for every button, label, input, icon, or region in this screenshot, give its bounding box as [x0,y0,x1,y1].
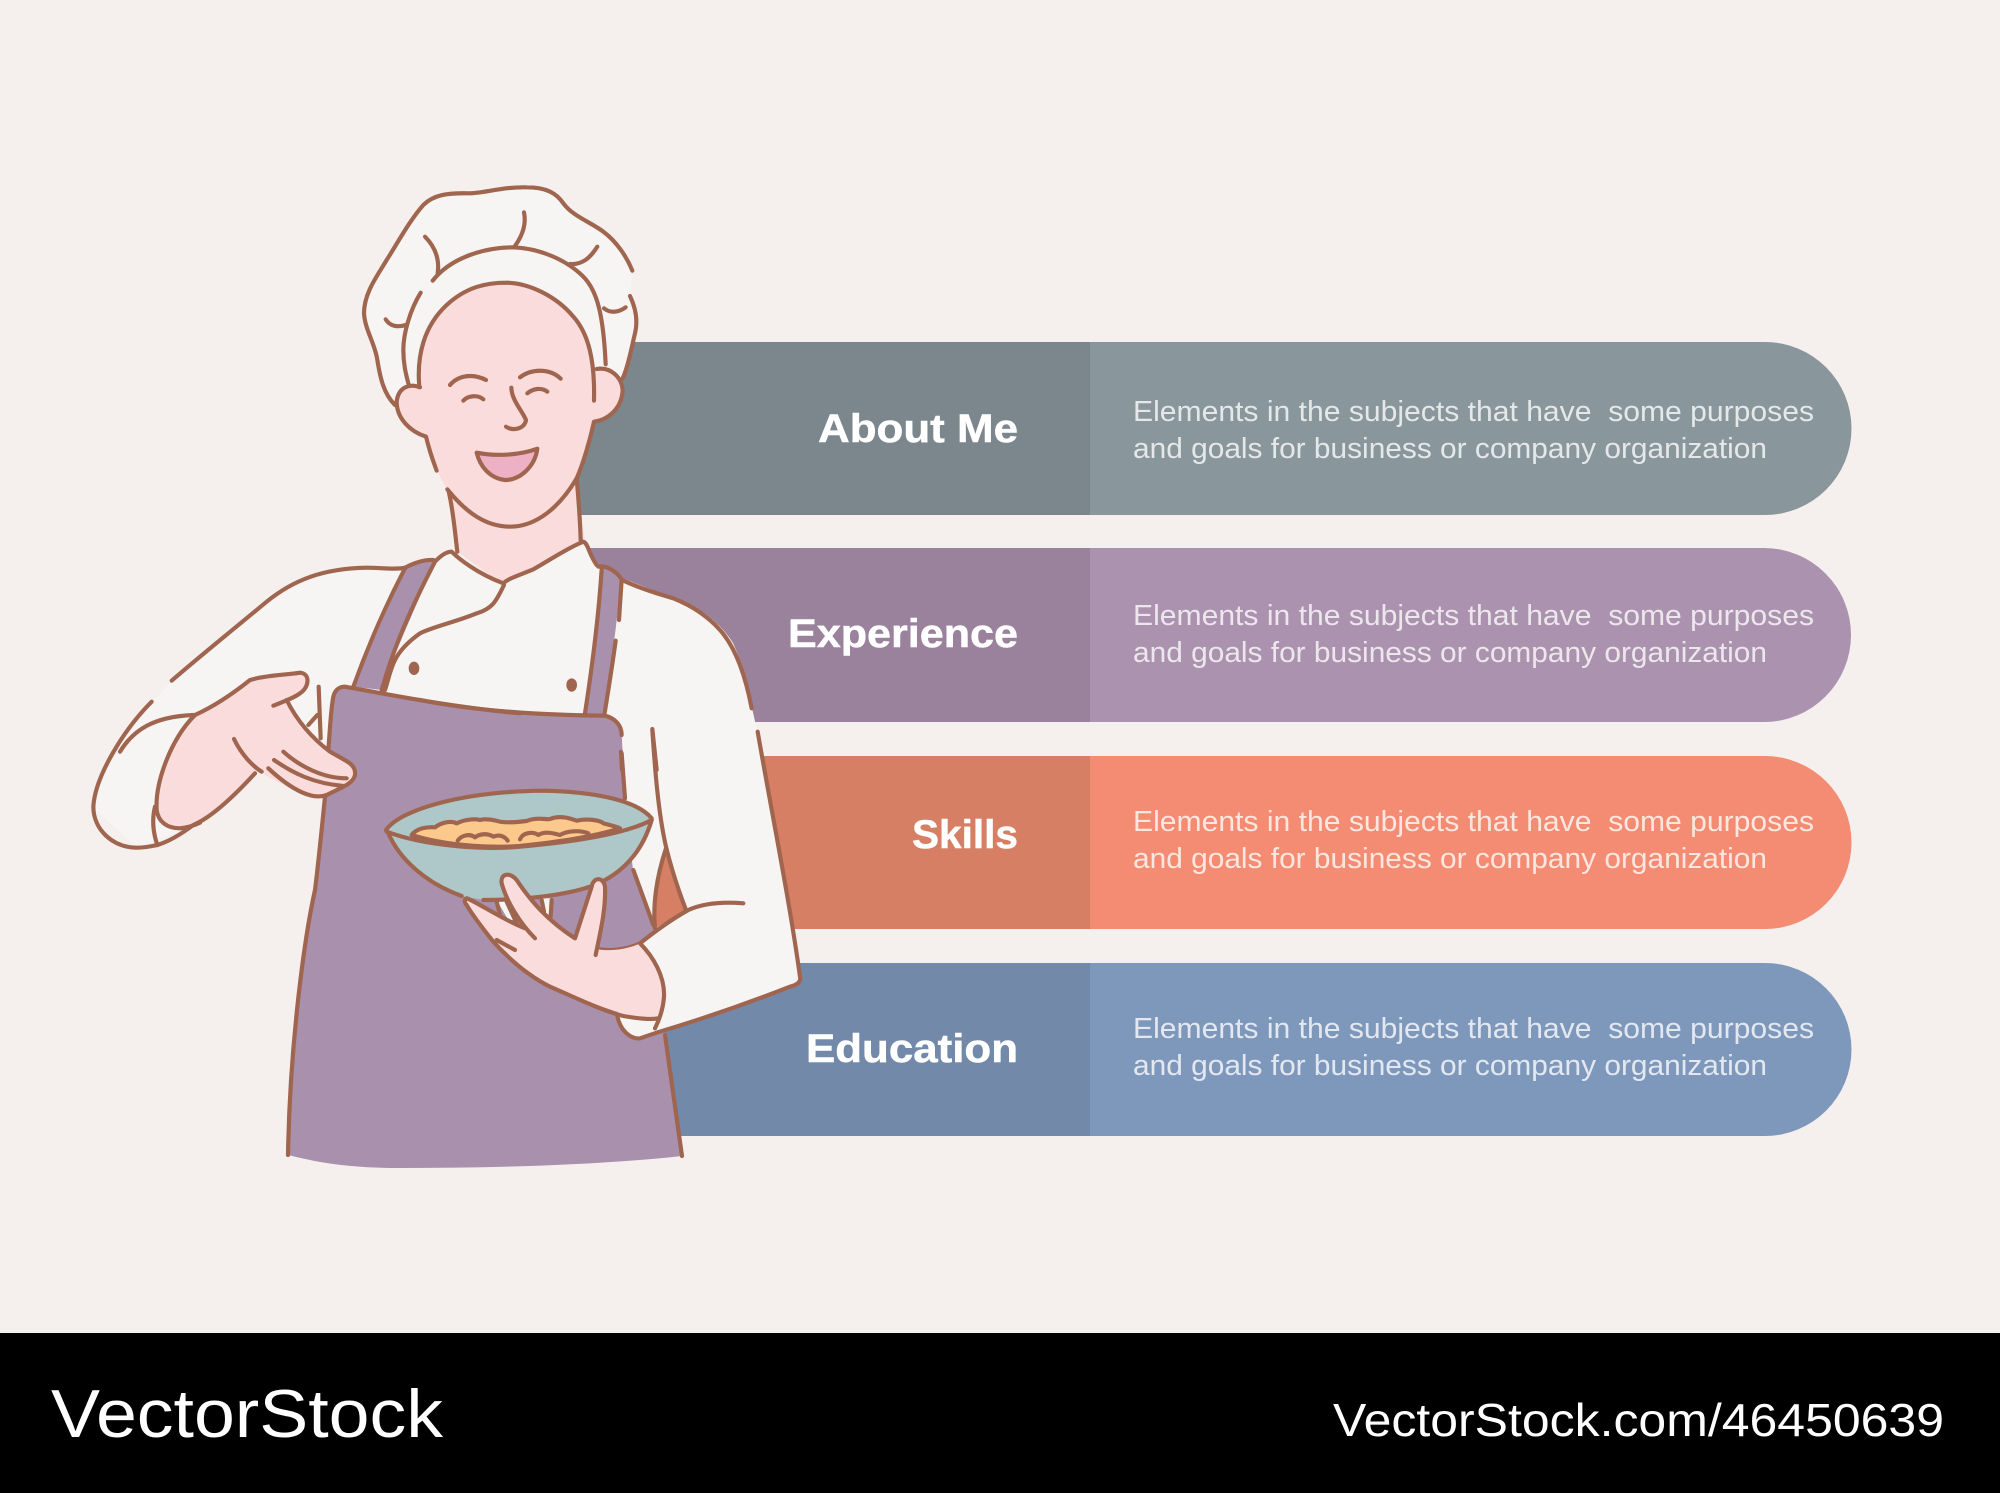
bowl [386,791,652,923]
text block: education: Elements in the subjects that have some purposes [1133,1013,1814,1045]
left hand [157,673,355,845]
panel: about me [560,342,1851,515]
apron [288,687,682,1168]
text block: experience: Elements in the subjects that have some purposes [1133,600,1814,632]
neck [448,478,585,585]
heading: education: Education [806,1027,1018,1071]
facial features [397,283,623,527]
heading: skills: Skills [912,813,1018,857]
torso outlines lower [622,730,686,928]
right side outlines [420,542,752,770]
panel: experience [580,548,1851,722]
jacket and apron outlines [288,890,682,1156]
right hand [465,875,664,1028]
gap under arm showing bar [654,848,685,928]
text block: about me [1133,396,1814,465]
text block: education [1133,1013,1814,1082]
panel: education [640,963,1851,1136]
text block: skills [1133,806,1814,875]
text block: education: and goals for business or company organization [1133,1050,1767,1082]
apron straps [353,560,622,715]
footer bar [0,1333,2000,1493]
text block: experience: and goals for business or company organization [1133,637,1767,669]
jacket [93,542,800,1038]
heading: about me: About Me [818,407,1018,451]
text block: about me: and goals for business or company organization [1133,433,1767,465]
illustration: chef holding bowl [93,187,800,1168]
panel: skills [650,756,1851,929]
food [412,817,620,847]
text block: about me: Elements in the subjects that have some purposes [1133,396,1814,428]
bowl underside bits [497,898,552,920]
right sleeve [600,732,800,1038]
text block: skills: and goals for business or company organization [1133,843,1767,875]
text block: experience [1133,600,1814,669]
left side outlines [93,560,520,890]
heading: experience: Experience [788,612,1018,656]
image id: VectorStock.com/46450639 [1333,1394,1944,1446]
mouth [477,449,537,480]
logo: VectorStock: VectorStock [51,1376,444,1452]
text block: skills: Elements in the subjects that have some purposes [1133,806,1814,838]
face [397,283,623,527]
chef hat [364,187,636,405]
